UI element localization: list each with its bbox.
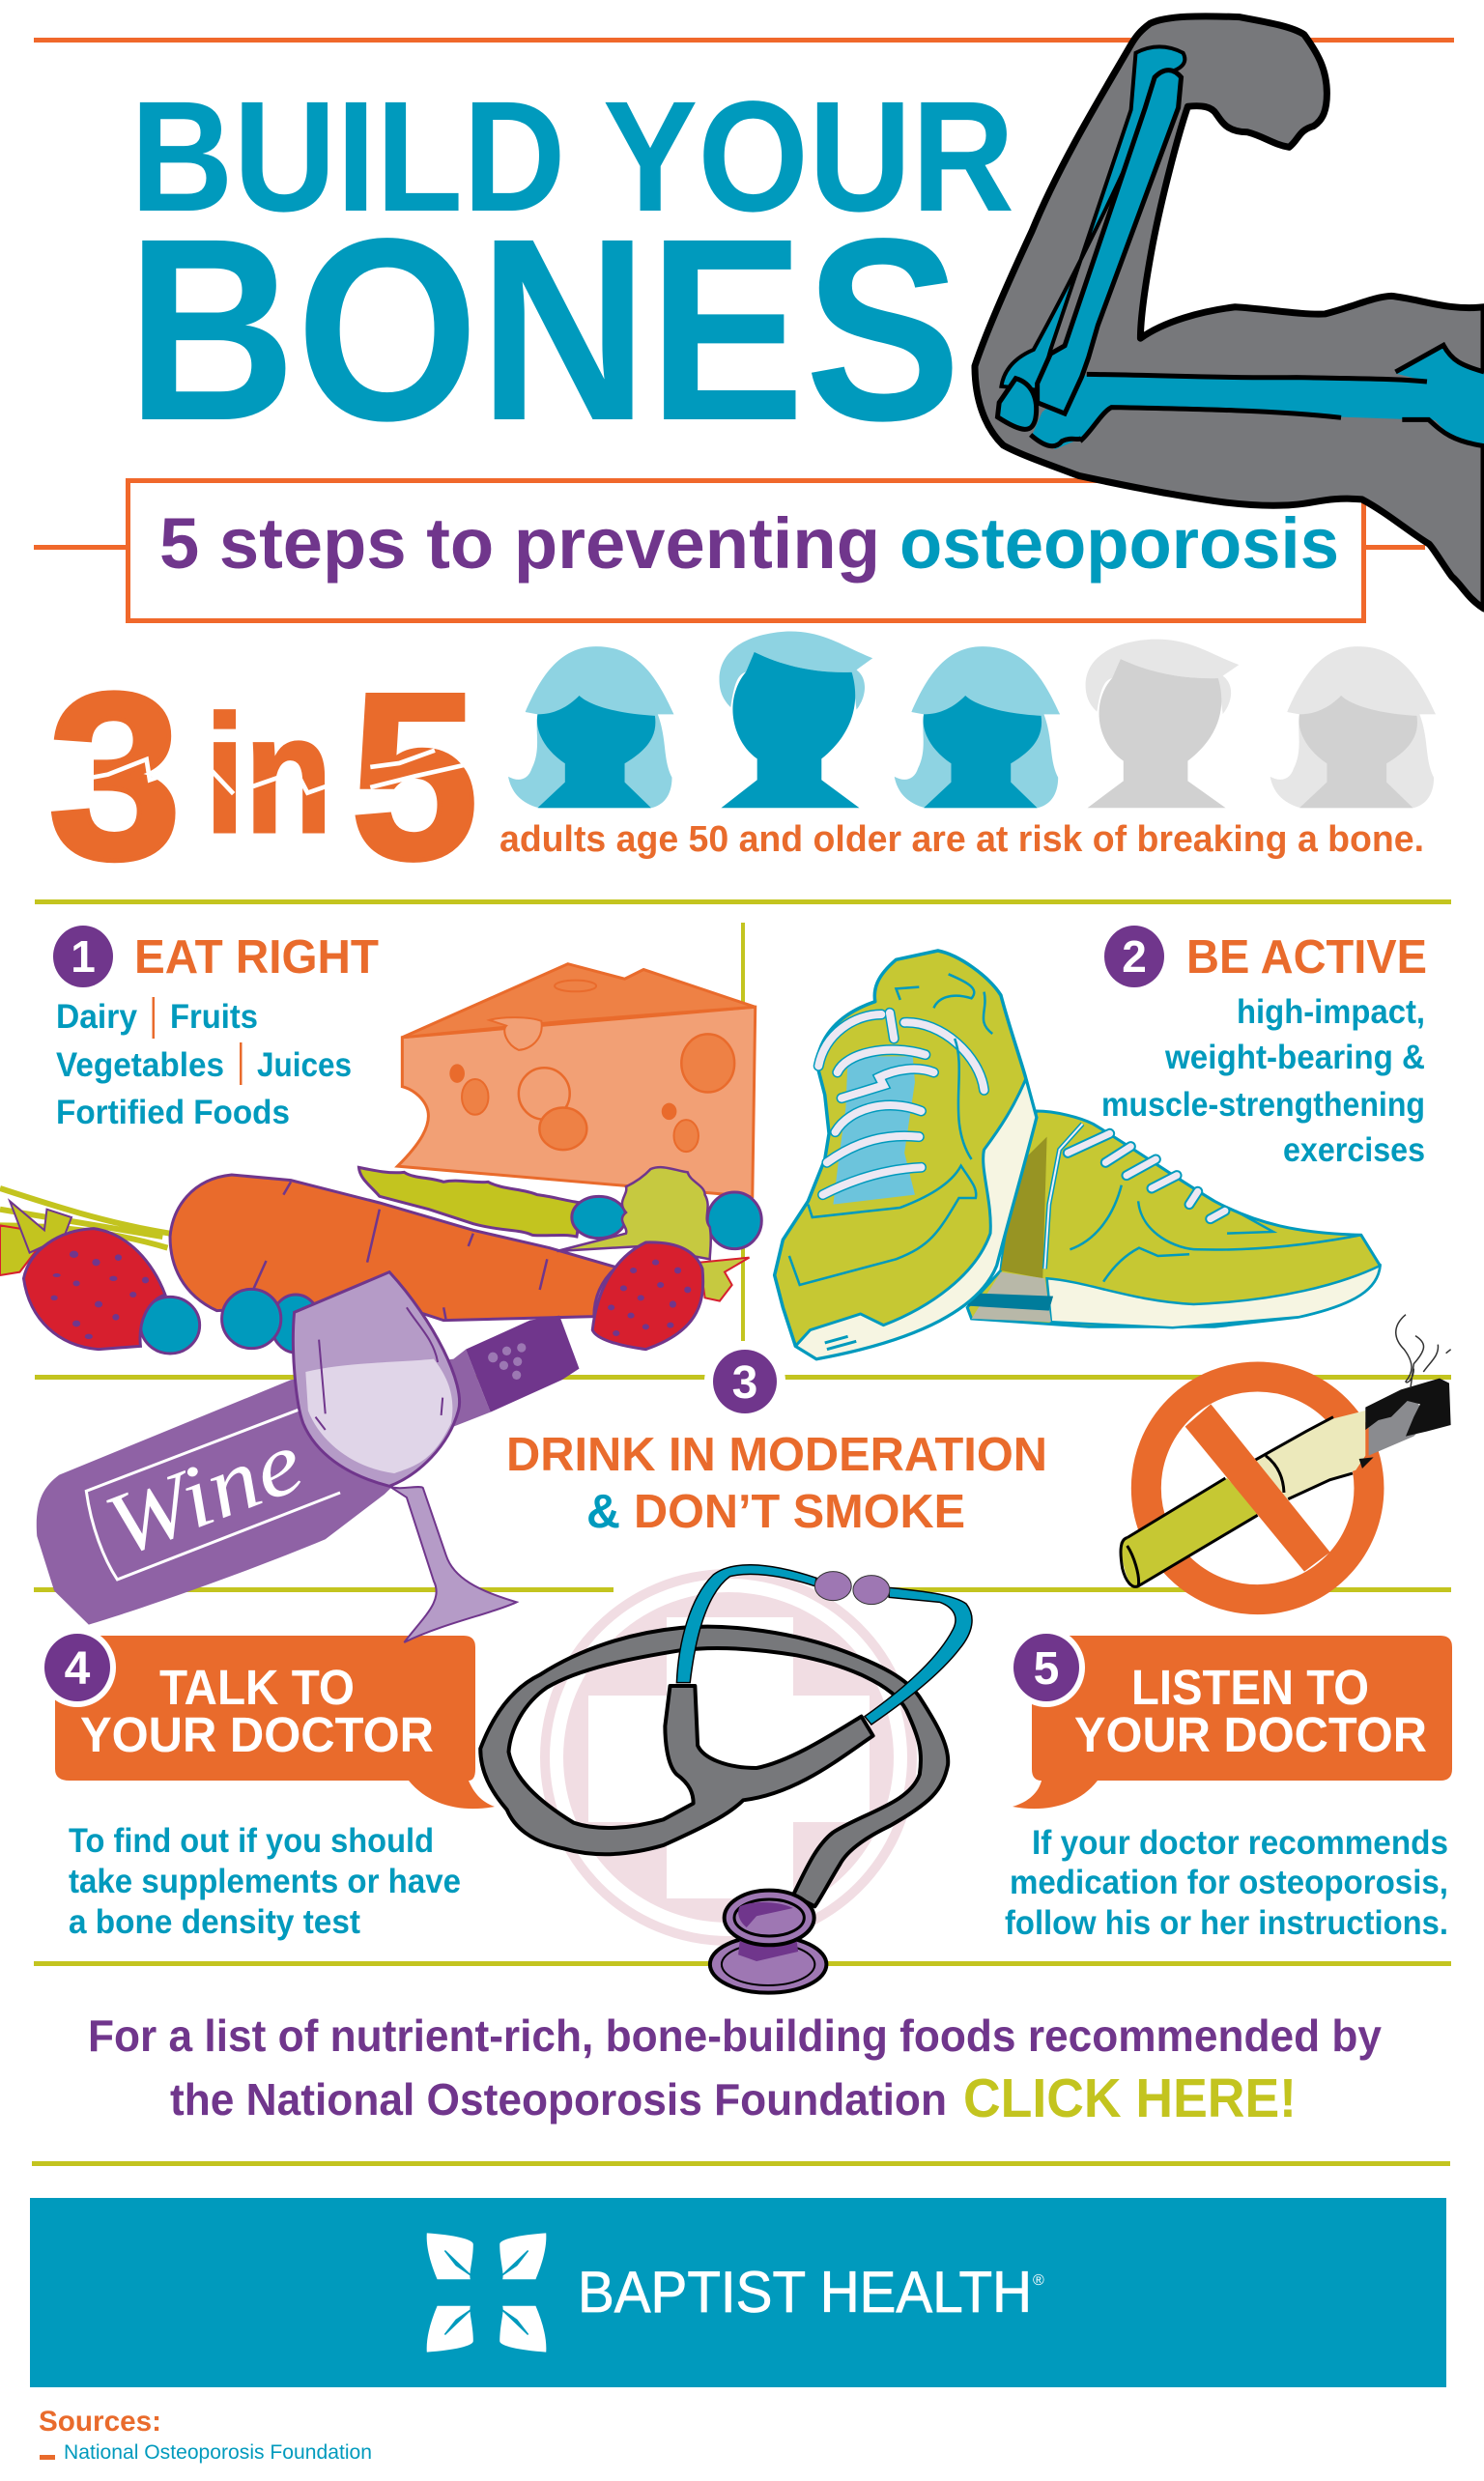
icon: smoke wisps: [1396, 1315, 1451, 1388]
icon: woman teal: [895, 646, 1060, 808]
step 4 description: a bone density test: [69, 1903, 360, 1941]
icon row: five adult silhouettes: [508, 631, 1436, 808]
icon: carrot: [170, 1175, 616, 1321]
icon: chest piece: [710, 1891, 826, 1993]
statistic: 3 in 5: 5: [351, 643, 478, 908]
icon: teal ear tubes: [676, 1565, 972, 1725]
step 4 description: take supplements or have: [69, 1863, 461, 1900]
step 3 heading: DRINK IN MODERATION: [506, 1429, 1047, 1481]
step 1 food list: [56, 997, 352, 1131]
subtitle box: [128, 481, 1364, 620]
speech bubble: talk to your doctor: YOUR DOCTOR: [80, 1707, 434, 1762]
step 2 description: weight-bearing &: [1164, 1039, 1425, 1076]
title: [127, 68, 1014, 475]
icon: cigarette: [1120, 1379, 1451, 1586]
icon: Baptist Health logo: [427, 2233, 546, 2353]
step 3 badge: [704, 1341, 785, 1422]
icon: prohibition ring: [1146, 1377, 1369, 1600]
icon: greens stems: [0, 1188, 170, 1275]
statistic: 3 in 5: 3: [48, 643, 182, 908]
step 1 food list: Dairy: [56, 998, 138, 1036]
icon: stethoscope: [480, 1565, 972, 1993]
speech bubble: listen to your doctor: [1013, 1636, 1452, 1809]
step 1 food list: Fruits: [170, 998, 258, 1036]
illustration: wine bottle: [37, 1316, 579, 1625]
icon: strawberry left: [23, 1229, 165, 1350]
step 1 food list: Vegetables: [56, 1046, 224, 1084]
icon: blueberries: [140, 1192, 761, 1354]
step 2 description: high-impact,: [1237, 993, 1425, 1031]
statistic caption: adults age 50 and older are at risk of breaking a bone.: [499, 819, 1424, 860]
step 2 heading: [1104, 926, 1427, 987]
step 4 badge: 4: [65, 1643, 91, 1695]
step 4 description: [69, 1822, 461, 1941]
icon: woman teal: [508, 646, 673, 808]
sources: National Osteoporosis Foundation: [64, 2441, 372, 2464]
icon: no smoking: [1120, 1315, 1451, 1600]
step 1 food list: Fortified Foods: [56, 1094, 290, 1131]
step 5 description: [1005, 1824, 1448, 1942]
icon: rear shoe: [967, 1111, 1380, 1327]
illustration: sneakers: [775, 951, 1380, 1359]
step 2 heading: 2: [1122, 931, 1147, 982]
speech bubble: listen to your doctor: YOUR DOCTOR: [1074, 1707, 1427, 1762]
title: BUILD YOUR: [130, 68, 1014, 244]
icon: prohibition slash: [1185, 1404, 1330, 1572]
icon: man teal: [719, 631, 872, 808]
call to action: [88, 2010, 1382, 2129]
speech bubble: talk to your doctor: [55, 1636, 495, 1809]
bottle label script: Wine: [93, 1412, 315, 1576]
logo wordmark: BAPTIST HEALTH: [578, 2260, 1032, 2324]
icon: tube connectors: [814, 1572, 890, 1605]
illustration: fruit and vegetables: [0, 1167, 761, 1354]
step 3 badge: 3: [732, 1357, 757, 1409]
step 5 description: follow his or her instructions.: [1005, 1904, 1448, 1942]
upper-arm bone and hand: [1031, 345, 1484, 449]
call to action: the National Osteoporosis Foundation: [170, 2074, 947, 2125]
sources: Sources:: [39, 2406, 161, 2438]
icon: green beans: [358, 1167, 582, 1237]
icon: flexed arm with bones: [975, 16, 1484, 609]
step 1 heading: 1: [71, 931, 96, 982]
icon: strawberry right: [592, 1242, 750, 1350]
step 2 description: muscle-strengthening: [1101, 1086, 1425, 1124]
elbow joint: [997, 379, 1037, 429]
statistic: 3 in 5: [48, 643, 478, 908]
step 4 badge: [39, 1628, 116, 1707]
title: BONES: [127, 185, 961, 475]
icon: medical cross emblem: [540, 1569, 917, 1946]
speech bubble: talk to your doctor: TALK TO: [159, 1660, 355, 1715]
call to action: For a list of nutrient-rich, bone-building foods recommended by: [88, 2010, 1382, 2061]
illustration: wine glass: [293, 1272, 517, 1642]
icon: cheese wedge: [397, 964, 756, 1197]
step 1 heading: [53, 926, 379, 987]
footer banner: ®: [1033, 2272, 1044, 2289]
step 5 badge: [1008, 1628, 1085, 1707]
arm silhouette and forearm bones: [975, 16, 1484, 609]
icon: front shoe: [775, 951, 1037, 1359]
subtitle box: osteoporosis: [899, 503, 1339, 584]
icon: tube loop: [480, 1627, 948, 1906]
step 5 badge: 5: [1034, 1643, 1059, 1695]
step 4 description: To find out if you should: [69, 1822, 434, 1860]
icon: man grey: [1086, 640, 1239, 808]
step 5 description: If your doctor recommends: [1032, 1824, 1448, 1862]
step 2 heading: BE ACTIVE: [1186, 931, 1427, 984]
call to action: CLICK HERE!: [963, 2068, 1297, 2129]
icon: woman grey: [1270, 646, 1436, 808]
step 1 heading: EAT RIGHT: [134, 931, 379, 984]
step 2 description: exercises: [1283, 1131, 1425, 1169]
fracture cracks: [85, 751, 466, 794]
step 5 description: medication for osteoporosis,: [1010, 1864, 1448, 1901]
icon: carrot segment marks: [254, 1182, 547, 1321]
step 2 description: [1101, 993, 1425, 1169]
step 3 heading: [506, 1429, 1047, 1538]
statistic: 3 in 5: in: [205, 680, 332, 868]
speech bubble: listen to your doctor: LISTEN TO: [1131, 1660, 1369, 1715]
sources: [39, 2406, 372, 2464]
step 3 heading: &: [586, 1486, 620, 1538]
footer banner: [30, 2198, 1446, 2387]
subtitle box: 5 steps to preventing: [159, 503, 880, 584]
step 3 heading: DON’T SMOKE: [634, 1486, 965, 1538]
step 1 food list: Juices: [257, 1046, 352, 1084]
icon: broccoli: [557, 1167, 711, 1259]
